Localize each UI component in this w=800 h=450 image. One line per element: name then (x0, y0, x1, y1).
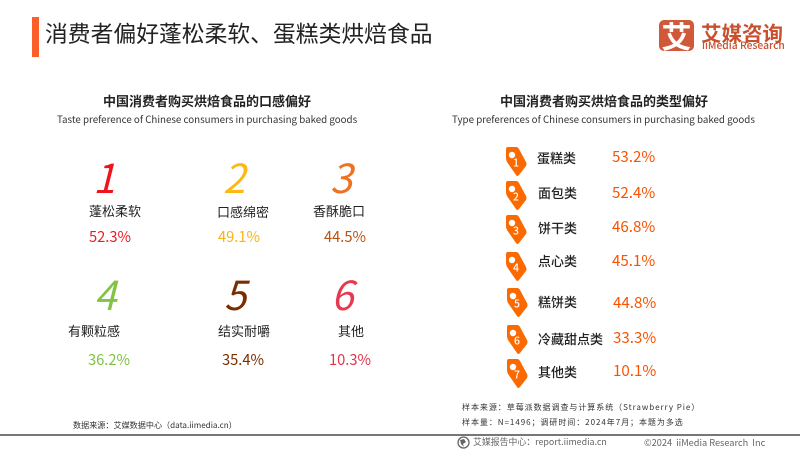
footer line (0, 434, 800, 436)
label 4: 有颗粒感 (68, 321, 120, 340)
value 1: 52.3% (89, 226, 131, 247)
tag 5: 5 (514, 296, 520, 312)
type heading: 中国消费者购买烘焙食品的类型偏好 (500, 91, 708, 110)
type label 3: 饼干类 (538, 218, 577, 237)
rank 5: 5 (224, 264, 246, 322)
type label 6: 冷藏甜点类 (538, 329, 603, 348)
label 6: 其他 (338, 321, 364, 340)
type value 2: 52.4% (612, 181, 655, 203)
tag 4 (506, 252, 526, 281)
tag 3 (506, 215, 526, 244)
label 3: 香酥脆口 (313, 201, 365, 220)
type label 7: 其他类 (538, 362, 577, 381)
title accent bar (32, 17, 39, 57)
tag 2 (506, 181, 526, 210)
logo icon: 艾 (662, 13, 692, 57)
logo (659, 13, 785, 57)
type value 1: 53.2% (612, 145, 655, 167)
sample source note: 样本来源：草莓派数据调查与计算系统（Strawberry Pie） (462, 402, 700, 413)
taste subheading: Taste preference of Chinese consumers in purchasing baked goods (57, 112, 357, 126)
taste heading: 中国消费者购买烘焙食品的口感偏好 (103, 91, 311, 110)
value 3: 44.5% (324, 226, 366, 247)
tag 5 (507, 288, 528, 317)
tag 7: 7 (514, 368, 520, 382)
value 6: 10.3% (329, 349, 371, 370)
panel: taste preference (57, 91, 371, 370)
type subheading: Type preferences of Chinese consumers in purchasing baked goods (452, 112, 755, 126)
logo English name: iiMedia Research (702, 37, 785, 52)
value 5: 35.4% (222, 349, 264, 370)
tag 2: 2 (513, 190, 519, 204)
rank 1: 1 (93, 147, 115, 205)
tag 1 (506, 147, 526, 176)
footer copyright: ©2024 iiMedia Research Inc (644, 435, 765, 449)
type label 4: 点心类 (538, 251, 577, 270)
type value 3: 46.8% (612, 215, 655, 237)
tag 7 (507, 359, 528, 388)
logo icon (659, 20, 694, 51)
type label 5: 糕饼类 (538, 292, 577, 311)
label 1: 蓬松柔软 (89, 201, 141, 220)
tag 1: 1 (513, 156, 519, 170)
type value 5: 44.8% (613, 291, 656, 313)
rank 3: 3 (330, 147, 352, 205)
value 4: 36.2% (88, 349, 130, 370)
rank 6: 6 (331, 264, 353, 322)
type value 6: 33.3% (613, 326, 656, 348)
tag 6: 6 (514, 334, 520, 348)
title: 消费者偏好蓬松柔软、蛋糕类烘焙食品 (45, 16, 433, 49)
label 5: 结实耐嚼 (218, 321, 270, 340)
footer globe icon (457, 436, 470, 449)
type label 2: 面包类 (538, 183, 577, 202)
label 2: 口感绵密 (217, 202, 269, 221)
tag 3: 3 (513, 224, 519, 238)
tag icons (506, 147, 528, 388)
type value 7: 10.1% (613, 359, 656, 381)
rank 4: 4 (94, 264, 116, 322)
panel: type preference (452, 91, 755, 388)
data source note: 数据来源：艾媒数据中心（data.iimedia.cn） (73, 420, 237, 431)
rank 2: 2 (223, 147, 245, 205)
tag 4: 4 (513, 260, 519, 276)
sample size note: 样本量：N=1496；调研时间：2024年7月；本题为多选 (462, 417, 684, 428)
footer report link: 艾媒报告中心：report.iimedia.cn (473, 435, 607, 448)
tag 6 (507, 325, 528, 354)
type value 4: 45.1% (612, 249, 655, 271)
value 2: 49.1% (218, 226, 260, 247)
logo Chinese name: 艾媒咨询 (701, 17, 783, 47)
type label 1: 蛋糕类 (537, 148, 576, 167)
